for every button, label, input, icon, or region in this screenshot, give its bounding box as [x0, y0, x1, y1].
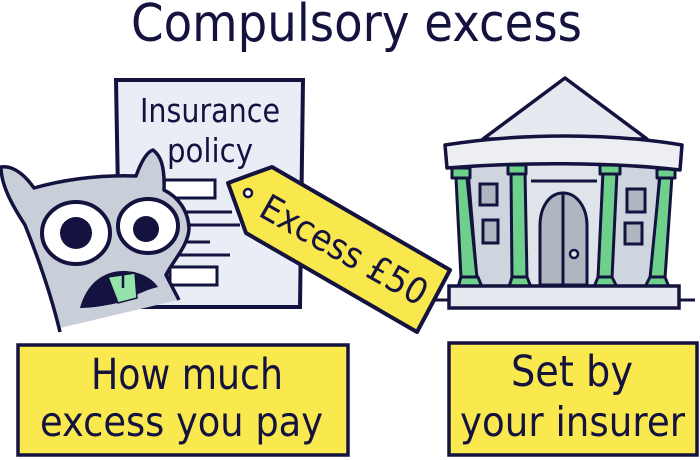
columns [452, 165, 675, 287]
entablature [445, 136, 682, 170]
caption: how much excess you pay: How much [91, 350, 283, 400]
caption: set by your insurer: Set by [511, 347, 633, 397]
plinth [449, 286, 679, 308]
left eye [42, 202, 110, 264]
tag text: Excess £50 [253, 187, 435, 314]
price tag [228, 167, 450, 332]
cat character [1, 150, 189, 332]
central bay [527, 165, 600, 286]
tongue [108, 273, 137, 303]
tag hole [244, 189, 252, 197]
walls [468, 165, 660, 286]
document heading [140, 91, 280, 170]
caption: set by your insurer [449, 343, 697, 455]
door [540, 193, 587, 285]
right eye [118, 199, 178, 253]
form fields [160, 180, 240, 285]
document heading: Insurance [140, 91, 280, 130]
roof [483, 78, 647, 139]
caption: how much excess you pay: excess you pay [40, 398, 323, 446]
ground line [435, 298, 695, 302]
windows [480, 184, 645, 244]
insurance policy document [116, 80, 303, 307]
mouth [80, 271, 158, 308]
bank building [435, 78, 695, 308]
document heading: policy [167, 131, 253, 170]
caption: how much excess you pay [18, 345, 348, 455]
